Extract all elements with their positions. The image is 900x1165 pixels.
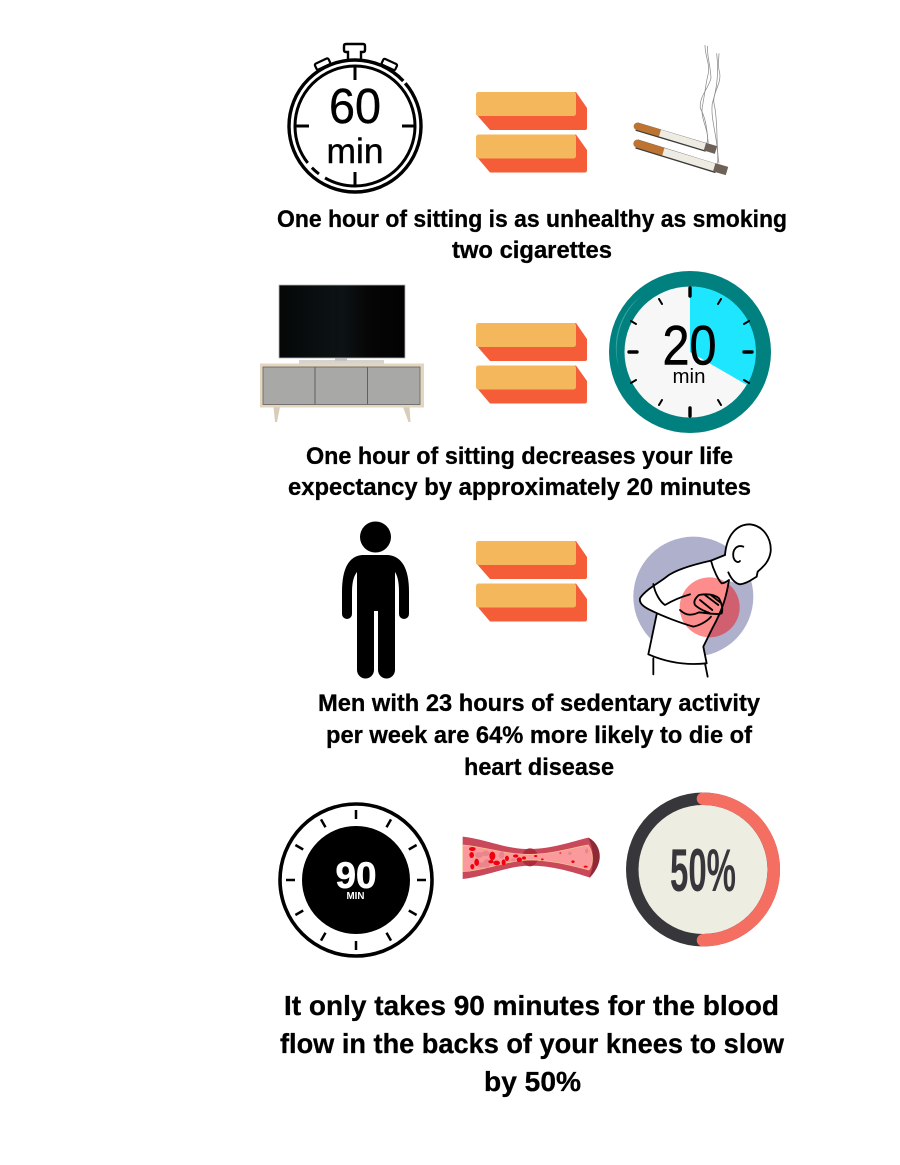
row 4: blood flow slows xyxy=(280,792,785,1097)
icon: 20 minute timer: min xyxy=(672,366,706,388)
icon: 60 minute stopwatch xyxy=(289,44,421,192)
caption: smoking: two cigarettes xyxy=(452,237,612,264)
icon: 90 minute dial: 90 xyxy=(336,855,376,896)
icon: 60 minute stopwatch: min xyxy=(326,132,384,171)
caption: blood flow: flow in the backs of your knees to slow xyxy=(280,1028,785,1059)
caption: smoking: One hour of sitting is as unhealthy as smoking xyxy=(277,206,787,233)
icon: narrowed artery xyxy=(463,837,600,879)
icon: television on cabinet xyxy=(260,285,424,422)
caption: life expectancy: expectancy by approximately 20 minutes xyxy=(288,474,751,501)
icon: equals sign xyxy=(476,541,587,622)
caption: heart disease: per week are 64% more likely to die of xyxy=(326,722,753,749)
icon: 50 percent gauge xyxy=(626,792,780,946)
caption: blood flow: by 50% xyxy=(484,1066,581,1097)
caption: heart disease xyxy=(318,690,761,781)
row 2: sitting equals 20 minutes lost xyxy=(260,271,771,501)
caption: blood flow: It only takes 90 minutes for the blood xyxy=(284,990,779,1021)
icon: 20 minute timer xyxy=(609,271,771,433)
icon: equals sign xyxy=(476,92,587,172)
icon: 90 minute dial xyxy=(280,804,432,956)
icon: equals sign xyxy=(476,323,587,404)
icon: 50 percent gauge: 50% xyxy=(670,837,736,904)
icon: 20 minute timer: 20 xyxy=(662,314,716,376)
row 3: sedentary men and heart disease xyxy=(318,522,771,781)
caption: life expectancy: One hour of sitting decreases your life xyxy=(306,443,733,470)
caption: heart disease: heart disease xyxy=(464,754,614,781)
icon: 90 minute dial: MIN xyxy=(346,891,364,902)
caption: life expectancy xyxy=(288,443,751,501)
row 1: sitting equals smoking xyxy=(277,44,787,264)
caption: heart disease: Men with 23 hours of sedentary activity xyxy=(318,690,761,717)
icon: 60 minute stopwatch: 60 xyxy=(329,80,381,134)
icon: man clutching chest xyxy=(633,524,771,677)
caption: smoking xyxy=(277,206,787,264)
icon: standing person xyxy=(342,522,409,678)
caption: blood flow xyxy=(280,990,785,1097)
icon: two cigarettes with smoke xyxy=(637,45,727,171)
